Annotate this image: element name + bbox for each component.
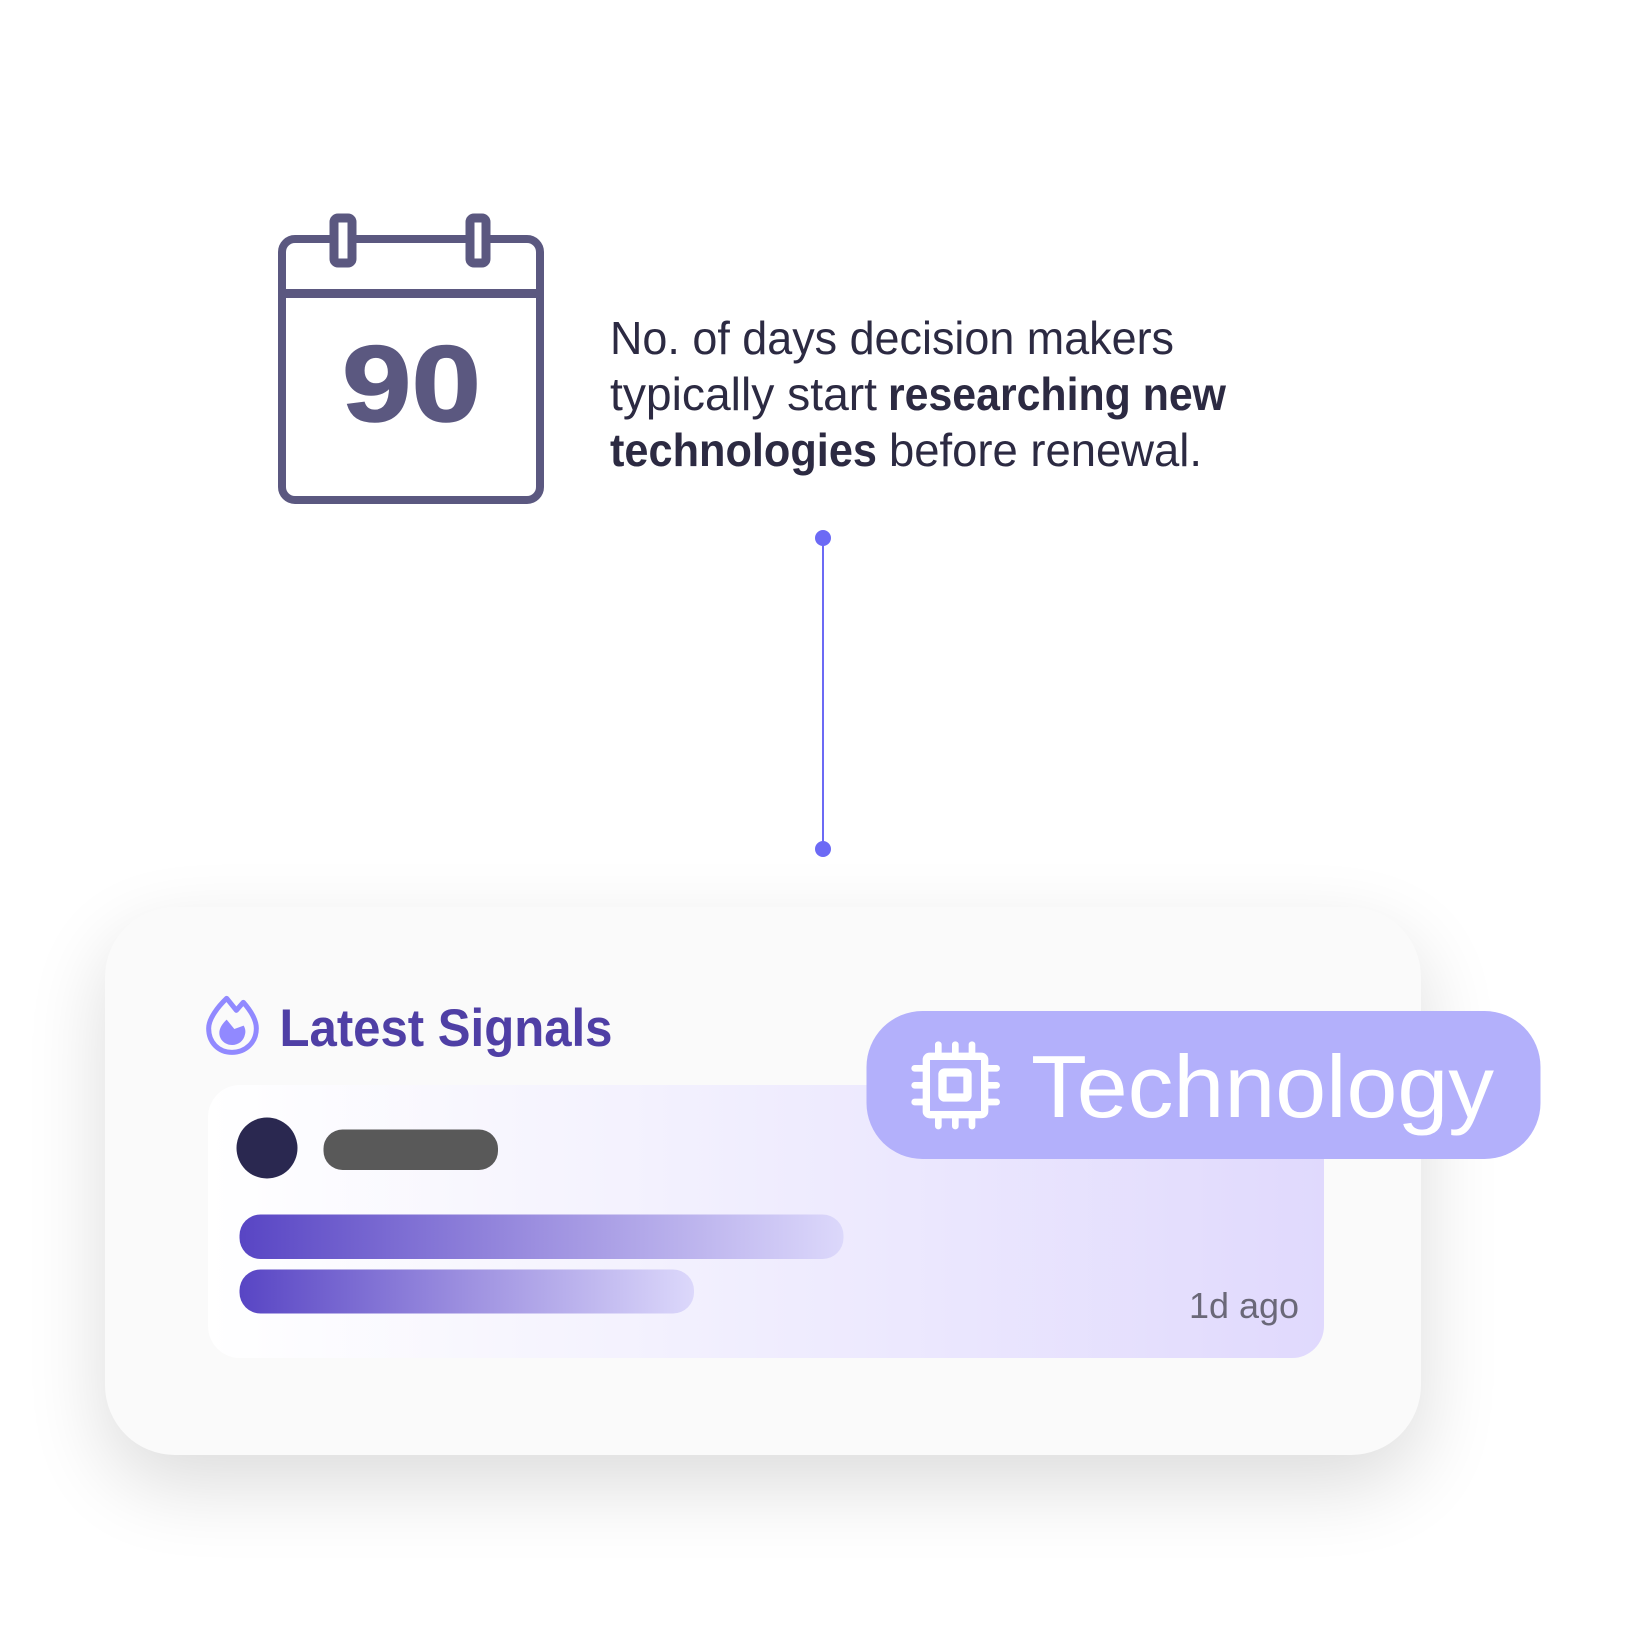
- heading: Latest Signals: Latest Signals: [280, 999, 612, 1058]
- text block: statistic description: [610, 312, 1226, 476]
- timestamp: 1d ago: [1189, 1285, 1299, 1326]
- text block: statistic description: No. of days decision makers: [610, 312, 1174, 364]
- text block: statistic description: typically start: [610, 368, 877, 420]
- panel: signal row: [208, 1085, 1324, 1358]
- badge label: Technology: [1031, 1037, 1494, 1136]
- icon: chip: [915, 1045, 997, 1126]
- text block: statistic description: before renewal.: [889, 424, 1202, 476]
- text block: statistic description: technologies: [610, 424, 877, 476]
- message bar 2: [240, 1270, 694, 1314]
- connector line: [815, 530, 831, 857]
- name placeholder: [324, 1130, 498, 1170]
- avatar circle: [236, 1118, 298, 1178]
- technology badge: [866, 1011, 1540, 1159]
- icon: calendar: [278, 218, 544, 500]
- text block: statistic description: researching new: [888, 368, 1226, 420]
- icon: flame: [209, 998, 256, 1052]
- message bar 1: [240, 1214, 844, 1259]
- calendar number: 90: [342, 323, 481, 444]
- panel: signals card: [105, 907, 1421, 1455]
